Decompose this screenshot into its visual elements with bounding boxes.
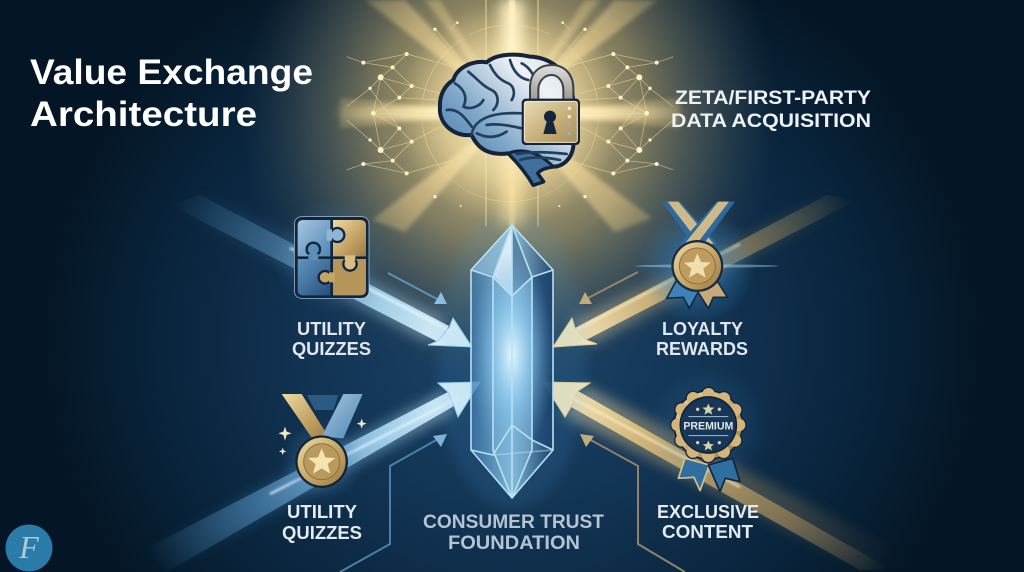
arrow: top-left blue xyxy=(170,192,472,347)
elbow arrow: bottom-left xyxy=(340,434,447,572)
label: consumer trust foundation: FOUNDATION xyxy=(448,533,580,554)
label: consumer trust foundation xyxy=(423,512,604,554)
label: utility quizzes top xyxy=(292,318,371,359)
icon: brain with padlock xyxy=(440,55,580,185)
badge word: PREMIUM xyxy=(683,421,733,433)
arrow: top-right gold xyxy=(553,193,857,347)
logo: F xyxy=(18,529,39,565)
padlock xyxy=(522,65,580,145)
label: exclusive content: CONTENT xyxy=(662,521,754,542)
icon: quiz medal xyxy=(278,394,367,503)
label: exclusive content: EXCLUSIVE xyxy=(657,501,759,522)
label: utility quizzes top: UTILITY xyxy=(297,318,367,339)
small arrow: top-left xyxy=(388,273,447,304)
crystal: consumer trust xyxy=(437,210,587,510)
label: utility quizzes bottom: QUIZZES xyxy=(282,522,362,543)
label: data acquisition xyxy=(671,88,871,132)
sparkles xyxy=(278,419,367,455)
brain xyxy=(440,55,573,185)
label: data acquisition: DATA ACQUISITION xyxy=(671,111,871,132)
label: utility quizzes top: QUIZZES xyxy=(292,338,371,359)
arrow: bottom-left blue xyxy=(143,382,480,572)
golden light burst xyxy=(240,0,780,383)
label: consumer trust foundation: CONSUMER TRUST xyxy=(423,512,604,533)
arrow: bottom-right gold xyxy=(543,382,900,572)
title second line: Architecture xyxy=(30,95,257,134)
elbow arrow: bottom-right xyxy=(580,434,685,572)
label: data acquisition: ZETA/FIRST-PARTY xyxy=(675,88,871,109)
label: exclusive content xyxy=(657,501,759,542)
title: Value Exchange xyxy=(30,53,313,92)
icon: premium badge xyxy=(647,365,770,492)
label: utility quizzes bottom xyxy=(282,501,362,543)
label: utility quizzes bottom: UTILITY xyxy=(287,501,358,522)
small arrow: top-right xyxy=(579,272,638,304)
label: loyalty rewards xyxy=(656,318,748,359)
icon: puzzle xyxy=(273,200,390,317)
label: loyalty rewards: REWARDS xyxy=(656,338,748,359)
label: loyalty rewards: LOYALTY xyxy=(662,318,744,339)
logo xyxy=(6,524,52,572)
network constellations xyxy=(347,21,673,207)
icon: loyalty medal xyxy=(635,202,778,324)
